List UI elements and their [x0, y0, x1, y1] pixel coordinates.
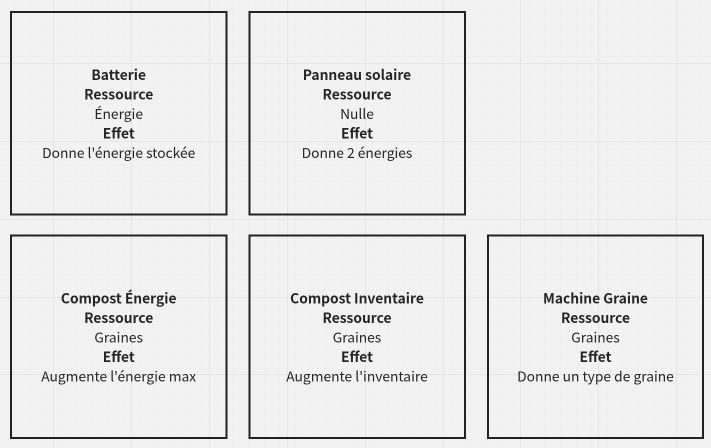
text: Machine Graine: Effet: [580, 346, 612, 366]
text: Machine Graine: Machine Graine: [543, 288, 648, 308]
text: Machine Graine: Donne un type de graine: [517, 366, 674, 386]
text: Panneau solaire: Panneau solaire: [303, 64, 411, 84]
text: Panneau solaire: Donne 2 énergies: [302, 142, 412, 162]
text: Panneau solaire: [302, 64, 412, 162]
text: Compost Inventaire: Ressource: [322, 307, 392, 327]
text: Compost Énergie: Compost Énergie: [61, 288, 176, 308]
text: Compost Énergie: [41, 288, 196, 386]
text: Batterie: Énergie: [94, 103, 143, 123]
text: Batterie: Batterie: [91, 64, 146, 84]
text: Machine Graine: Graines: [571, 326, 620, 346]
panel: Batterie: [11, 12, 226, 214]
text: Compost Énergie: Graines: [94, 326, 143, 346]
text: Machine Graine: [517, 288, 674, 386]
text: Compost Énergie: Ressource: [84, 307, 153, 327]
text: Compost Énergie: Augmente l'énergie max: [41, 366, 196, 386]
text: Compost Inventaire: Compost Inventaire: [290, 288, 424, 308]
text: Machine Graine: Ressource: [561, 307, 630, 327]
text: Batterie: Ressource: [84, 84, 153, 104]
text: Panneau solaire: Ressource: [322, 84, 392, 104]
text: Compost Inventaire: Effet: [341, 346, 373, 366]
panel: Compost Énergie: [11, 236, 226, 438]
text: Batterie: [42, 64, 196, 162]
text: Batterie: Donne l'énergie stockée: [42, 142, 196, 162]
text: Compost Inventaire: [286, 288, 428, 386]
text: Compost Inventaire: Graines: [333, 326, 381, 346]
panel: Machine Graine: [488, 236, 703, 438]
text: Panneau solaire: Nulle: [340, 103, 374, 123]
text: Compost Inventaire: Augmente l'inventaire: [286, 366, 428, 386]
text: Batterie: Effet: [103, 122, 135, 142]
panel: Panneau solaire: [250, 12, 465, 214]
text: Compost Énergie: Effet: [103, 346, 135, 366]
panel: Compost Inventaire: [250, 236, 465, 438]
text: Panneau solaire: Effet: [341, 122, 373, 142]
